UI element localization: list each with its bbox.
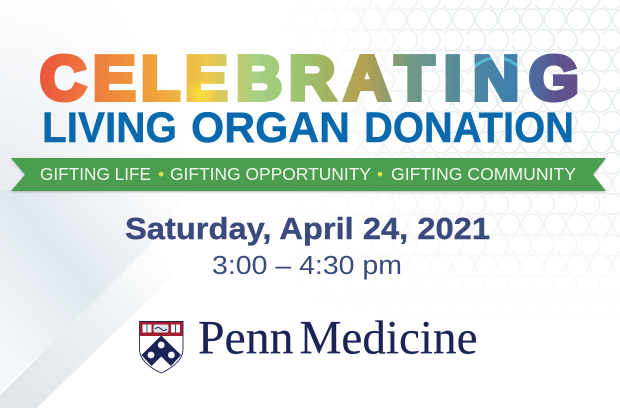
subtitle: living organ donation: DONATION xyxy=(364,104,574,152)
shield body xyxy=(140,322,183,373)
title: celebrating: CELEBRATING xyxy=(40,44,579,113)
chevron xyxy=(142,336,181,366)
ribbon tagline: GIFTING OPPORTUNITY xyxy=(170,164,371,184)
penn medicine wordmark: Penn xyxy=(198,312,294,364)
penn medicine wordmark: Medicine xyxy=(300,312,478,364)
event time: 3:00 – 4:30 pm xyxy=(212,252,402,280)
ribbon shape xyxy=(11,158,606,191)
chevron roundels xyxy=(148,342,175,358)
ribbon tagline: • xyxy=(158,164,164,184)
subtitle: living organ donation: ORGAN xyxy=(191,104,350,152)
ribbon tagline: • xyxy=(377,164,383,184)
event date: Saturday, April 24, 2021 xyxy=(125,211,490,246)
red band with books xyxy=(140,322,183,336)
penn shield logo xyxy=(140,322,183,373)
ribbon tagline: GIFTING COMMUNITY xyxy=(391,164,576,184)
ribbon tagline: GIFTING LIFE xyxy=(40,164,151,184)
subtitle: living organ donation: LIVING xyxy=(42,104,177,152)
banner ribbon xyxy=(11,158,606,191)
